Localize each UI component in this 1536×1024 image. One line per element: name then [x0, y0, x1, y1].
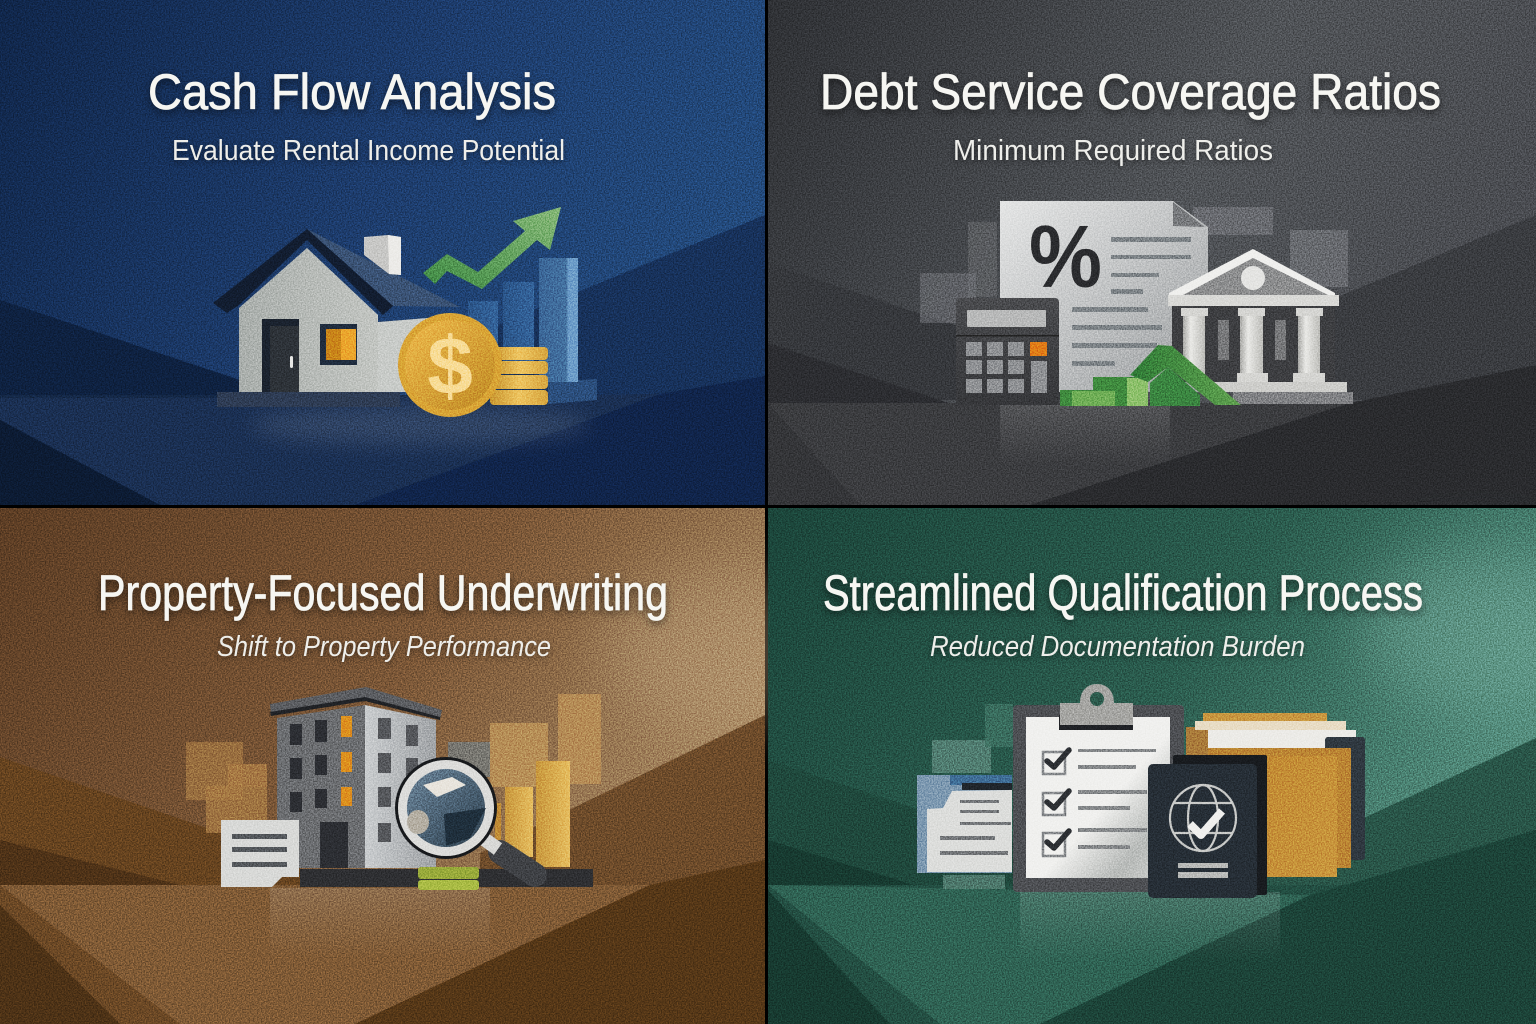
icon: bar chart [495, 761, 570, 867]
icon: clipboard checklist [1013, 684, 1184, 892]
panel background [0, 508, 840, 1024]
panel: property-focused underwriting [0, 508, 840, 1024]
icon: bank [1168, 249, 1353, 404]
subtitle: Minimum Required Ratios [953, 135, 1273, 167]
building plinth [300, 869, 593, 887]
icon: magnifying glass [395, 757, 535, 875]
subtitle: Shift to Property Performance [217, 631, 551, 663]
title: Debt Service Coverage Ratios [820, 64, 1441, 120]
icon: calculator [956, 298, 1059, 405]
icon: bar chart [468, 258, 597, 404]
panel background [768, 508, 1536, 1024]
icon: green money and house [1060, 345, 1241, 406]
panel: streamlined qualification process [768, 508, 1536, 1024]
subtitle: Evaluate Rental Income Potential [172, 135, 565, 167]
icon: percent document: % [1029, 207, 1102, 306]
title: Cash Flow Analysis [148, 64, 556, 120]
panel: debt service coverage ratios [768, 0, 1536, 505]
panel background [768, 0, 1536, 505]
icon: house [213, 229, 460, 407]
icon: blue folder with document [917, 775, 1012, 873]
icon: growth arrow [423, 207, 561, 289]
icon: coin stack [490, 347, 548, 405]
panel: cash flow analysis [0, 0, 765, 505]
icon: dollar coin: $ [427, 321, 473, 412]
subtitle: Reduced Documentation Burden [930, 631, 1305, 663]
icon: note card [221, 820, 299, 887]
title: Property-Focused Underwriting [98, 565, 668, 621]
icon: percent document [1000, 201, 1208, 392]
icon: passport [1148, 755, 1267, 898]
panel background [0, 0, 765, 505]
icon: folder stack [1186, 713, 1365, 877]
icon: green coins [418, 867, 479, 890]
icon: office building [270, 687, 442, 868]
icon: dollar coin [398, 313, 502, 417]
